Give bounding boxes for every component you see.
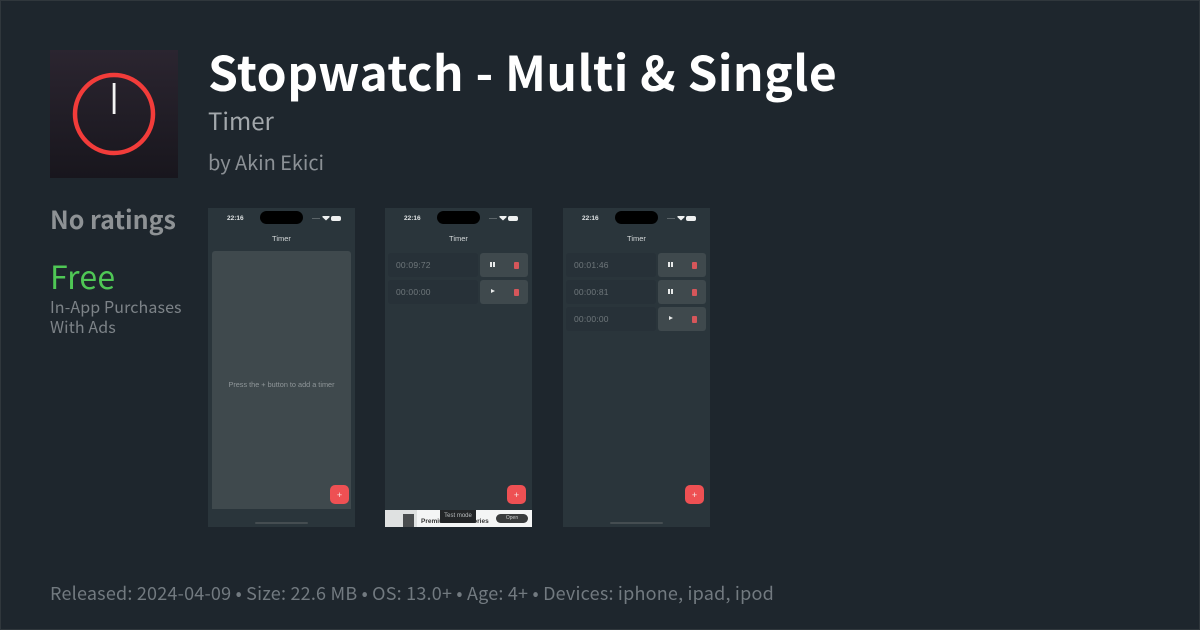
ratings: No ratings: [50, 201, 176, 237]
ad thumbnail: [385, 510, 417, 527]
screenshot 1: [208, 208, 355, 527]
timer row 2: [396, 280, 528, 304]
developer: by Akin Ekici: [208, 147, 324, 176]
add button: +: [692, 490, 697, 500]
screenshot 2: [385, 208, 532, 527]
status bar: 22:16: [404, 214, 421, 222]
timer row 1: [574, 253, 706, 277]
status bar: [582, 211, 696, 224]
purchase notes: With Ads: [50, 314, 116, 338]
status bar: 22:16: [582, 214, 599, 222]
status bar: [227, 211, 341, 224]
test mode label: Test mode: [444, 513, 472, 519]
status bar: 22:16: [227, 214, 244, 222]
subtitle: Timer: [208, 102, 274, 137]
add button: +: [514, 490, 519, 500]
add button: [330, 485, 349, 504]
timer row 3: [574, 307, 706, 331]
add button: +: [337, 490, 342, 500]
screen heading: Timer: [627, 234, 646, 242]
ad open button: [496, 514, 528, 523]
test mode label: [440, 510, 476, 523]
price: Free: [50, 253, 115, 299]
add button: [685, 485, 704, 504]
empty state text: Press the + button to add a timer: [228, 380, 335, 389]
purchase notes: In-App Purchases: [50, 294, 182, 318]
timer row 1: 00:01:46: [574, 260, 609, 270]
metadata footer: Released: 2024-04-09 • Size: 22.6 MB • OS: 13.0+ • Age: 4+ • Devices: iphone, ipad, ipod: [50, 580, 774, 606]
ad banner: [385, 510, 532, 527]
title: Stopwatch - Multi & Single: [208, 35, 837, 105]
app icon: [50, 50, 178, 178]
screen heading: Timer: [272, 234, 291, 242]
purchase notes: [50, 294, 182, 338]
status bar: [404, 211, 518, 224]
timer row 2: [574, 280, 706, 304]
home bar: [610, 522, 663, 524]
timer row 2: 00:00:00: [396, 286, 431, 296]
ad open button: Open: [506, 515, 518, 521]
timer row 3: 00:00:00: [574, 314, 609, 324]
timer row 1: [396, 253, 528, 277]
home bar: [255, 522, 308, 524]
timer row 2: 00:00:81: [574, 286, 609, 296]
timer row 1: 00:09:72: [396, 260, 431, 270]
add button: [507, 485, 526, 504]
screenshot 3: [563, 208, 710, 527]
ad headline: Premium Accessories: [421, 518, 489, 525]
screen heading: Timer: [449, 234, 468, 242]
empty state panel: [212, 251, 351, 509]
